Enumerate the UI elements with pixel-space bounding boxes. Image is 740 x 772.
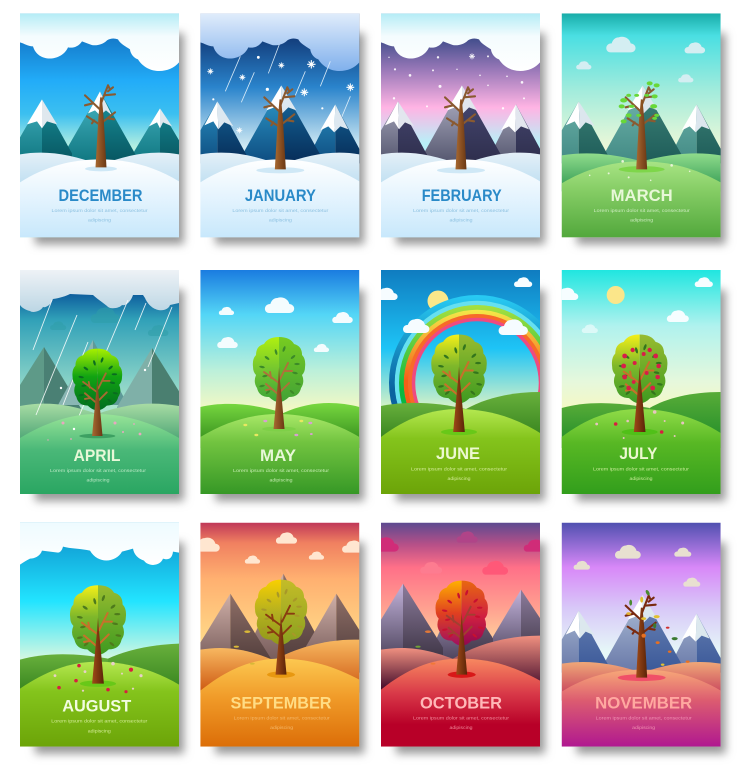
rain streaks <box>225 44 350 120</box>
tree <box>72 349 122 438</box>
title: OCTOBER <box>420 693 502 712</box>
card: November <box>562 523 726 754</box>
budding tree <box>619 87 665 173</box>
faint clouds <box>50 307 168 336</box>
hills <box>381 392 540 494</box>
rainbow <box>392 298 562 468</box>
caption: adipiscing <box>88 728 111 733</box>
caption: adipiscing <box>630 218 654 223</box>
sun <box>428 290 448 312</box>
clouds <box>576 37 705 82</box>
sky <box>562 13 721 237</box>
snow hills <box>20 153 179 237</box>
caption: Lorem ipsum dolor sit amet, consectetur <box>413 208 510 213</box>
clouds <box>372 531 547 575</box>
caption <box>232 208 329 223</box>
caption <box>411 467 508 481</box>
hills <box>562 153 721 237</box>
hills <box>562 392 721 494</box>
falling leaves <box>415 630 435 665</box>
flowers <box>47 422 141 441</box>
caption: adipiscing <box>88 218 111 223</box>
tree <box>70 585 126 687</box>
caption <box>596 716 692 730</box>
caption: adipiscing <box>269 218 292 223</box>
card: March <box>562 13 726 244</box>
caption: adipiscing <box>448 476 471 481</box>
sky <box>200 270 359 494</box>
tree <box>255 580 307 678</box>
hills <box>562 662 721 747</box>
title: AUGUST <box>62 697 132 716</box>
mountains <box>200 85 362 163</box>
front hill <box>20 414 179 494</box>
sky <box>381 270 540 494</box>
tree <box>437 87 485 173</box>
mountains <box>200 574 362 673</box>
apples <box>621 348 661 390</box>
rain dots <box>60 369 146 430</box>
young leaves <box>619 81 660 123</box>
caption: Lorem ipsum dolor sit amet, consectetur <box>411 467 508 472</box>
clouds <box>555 277 713 333</box>
caption <box>233 468 330 483</box>
title: DECEMBER <box>58 186 142 205</box>
snow hills <box>381 153 540 237</box>
tree <box>85 85 117 171</box>
tree <box>431 334 487 435</box>
card: August <box>20 523 184 754</box>
caption: Lorem ipsum dolor sit amet, consectetur <box>52 208 148 213</box>
card: April <box>20 270 184 501</box>
sky <box>200 13 359 237</box>
caption <box>593 467 690 481</box>
card: June <box>375 270 562 501</box>
sky <box>200 523 359 747</box>
caption: Lorem ipsum dolor sit amet, consectetur <box>234 716 330 721</box>
snow hills <box>200 153 359 237</box>
cloud band <box>200 13 359 71</box>
sky <box>20 13 179 237</box>
sun <box>607 286 625 304</box>
sky <box>20 294 179 413</box>
caption: adipiscing <box>270 725 294 730</box>
caption <box>594 208 690 223</box>
snowflakes <box>207 56 354 137</box>
sky <box>562 523 721 747</box>
title: NOVEMBER <box>595 693 692 712</box>
title: FEBRUARY <box>422 186 502 205</box>
cloud band <box>381 13 540 71</box>
clouds <box>574 545 700 587</box>
card: September <box>193 523 365 754</box>
hills <box>381 636 540 747</box>
flowers <box>243 420 313 436</box>
hills <box>20 404 179 448</box>
caption: Lorem ipsum dolor sit amet, consectetur <box>593 467 690 472</box>
caption: adipiscing <box>270 478 293 483</box>
mountains <box>562 85 724 163</box>
cloud band <box>20 270 179 312</box>
rain streaks <box>33 300 172 428</box>
mountains <box>381 584 543 673</box>
cloud band <box>20 523 179 565</box>
card: July <box>555 270 726 501</box>
sky <box>562 270 721 494</box>
clouds <box>193 532 365 564</box>
title: JULY <box>619 444 658 463</box>
card: January <box>200 13 364 244</box>
tree <box>618 596 666 681</box>
caption: Lorem ipsum dolor sit amet, consectetur <box>50 468 147 473</box>
caption: Lorem ipsum dolor sit amet, consectetur <box>233 468 330 473</box>
tree <box>256 87 304 173</box>
card: October <box>372 523 547 754</box>
title: APRIL <box>74 446 120 465</box>
caption <box>413 716 510 730</box>
cloud band <box>20 13 179 71</box>
title: JUNE <box>436 444 480 463</box>
clouds <box>375 277 532 335</box>
flowers and fallen apples <box>54 662 143 693</box>
tree <box>253 337 305 431</box>
hills <box>200 403 359 494</box>
tree <box>612 334 667 435</box>
sky <box>381 13 540 237</box>
caption: adipiscing <box>450 725 473 730</box>
caption: Lorem ipsum dolor sit amet, consectetur <box>596 716 692 721</box>
mountains <box>20 340 182 420</box>
sky <box>20 523 179 747</box>
caption <box>52 208 148 223</box>
snow dots <box>388 53 525 110</box>
flowers and fallen apples <box>595 410 684 439</box>
caption <box>50 468 147 483</box>
title: MAY <box>260 446 297 465</box>
caption: Lorem ipsum dolor sit amet, consectetur <box>51 719 148 724</box>
caption: adipiscing <box>450 218 473 223</box>
falling leaves <box>234 630 255 665</box>
title: JANUARY <box>245 186 316 205</box>
mountains <box>562 595 724 673</box>
caption: Lorem ipsum dolor sit amet, consectetur <box>232 208 329 213</box>
caption: adipiscing <box>632 725 656 730</box>
caption <box>234 716 330 730</box>
caption <box>51 719 148 733</box>
tree <box>436 581 488 678</box>
caption: Lorem ipsum dolor sit amet, consectetur <box>413 716 510 721</box>
hills <box>20 644 179 747</box>
caption: adipiscing <box>86 478 110 483</box>
caption: adipiscing <box>629 476 653 481</box>
hills <box>200 640 359 747</box>
title: MARCH <box>611 186 673 205</box>
sky <box>381 523 540 747</box>
clouds <box>217 297 353 352</box>
caption <box>413 208 510 223</box>
autumn leaves <box>626 589 690 666</box>
caption: Lorem ipsum dolor sit amet, consectetur <box>594 208 690 213</box>
card: December <box>20 13 184 244</box>
card: May <box>200 270 364 501</box>
spring flowers <box>589 160 690 181</box>
mountains <box>20 91 182 163</box>
mountains <box>381 85 543 163</box>
card: February <box>381 13 545 244</box>
title: SEPTEMBER <box>231 693 332 712</box>
